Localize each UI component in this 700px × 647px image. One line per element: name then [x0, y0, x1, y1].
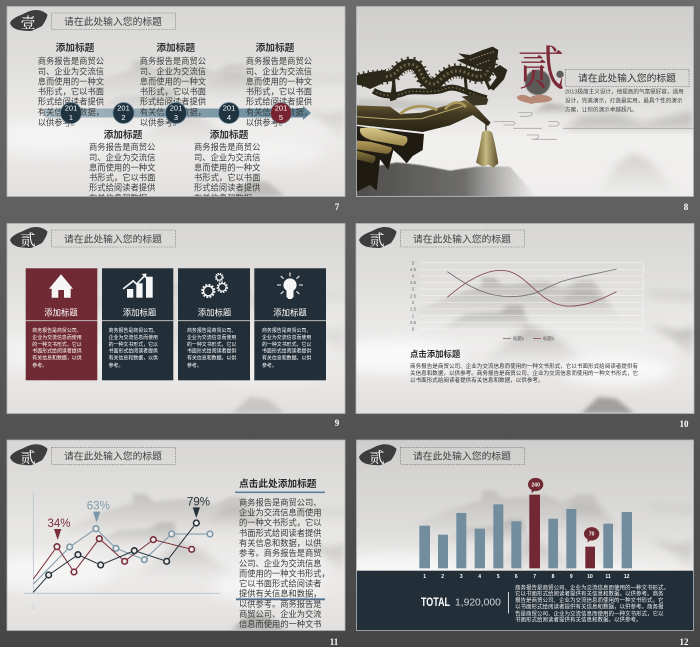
timeline node 2015: 201 [275, 104, 287, 112]
seal: 贰: 贰 [369, 232, 385, 249]
dragon legs and fins [359, 72, 490, 100]
seal: 贰 [10, 227, 48, 249]
text block: column 1: 书形式，它以书面 [38, 87, 104, 97]
value 79%: 79% [187, 496, 210, 508]
text block: 以书面形式给阅读者提供有关信息和数据，以供参考。 [410, 376, 544, 384]
card heading: 添加标题 [44, 308, 78, 318]
text block: column 3: 添加标题 [256, 41, 295, 54]
card 1: house [26, 268, 97, 380]
marker: maroon [54, 529, 61, 540]
text block: 而使用的一种文书形式， [239, 568, 330, 578]
timeline node 2014 [218, 102, 240, 124]
text block: 商务报告是商贸公司、企业为交流信息而使用的一种文书形式， [515, 584, 669, 592]
text block: 的一种文书形式，它以 [239, 518, 322, 528]
axis labels: 7 [533, 574, 536, 580]
seal: 贰: 贰 [20, 449, 36, 466]
line chart [24, 493, 220, 611]
card text: 商务报告是商贸公司、 [109, 327, 158, 334]
timeline node 2011: 201 [65, 104, 77, 112]
axis labels: 8 [552, 574, 555, 580]
title box [400, 447, 524, 464]
bell [485, 122, 487, 131]
axis labels: 4 [478, 574, 481, 580]
title box [565, 69, 689, 87]
card text: 商务报告是商贸公司、 [187, 327, 236, 334]
timeline node 2014: 201 [223, 104, 235, 112]
text block: column 1: 司、企业为交流信 [38, 66, 104, 76]
text block: column 2 [140, 41, 207, 127]
text block: column 2: 书形式，它以书面 [140, 87, 206, 97]
axis labels: 6 [515, 574, 518, 580]
card text: 有关信息和数据，以供 [32, 355, 82, 362]
timeline node 2013 [166, 102, 186, 124]
text block: 以书面形式给阅读者提供有关信息和数据，以供参考。商务报 [515, 603, 664, 611]
line chart: 3.5 [410, 280, 417, 285]
text block: column 2: 商务报告是商贸公 [140, 56, 206, 66]
text block: column 4: 有关信息和数据， [89, 193, 155, 203]
card text: 的一种文书形式，它以 [187, 341, 236, 348]
text block: 它以书面形式给阅读者提供有关信息和数据，以供参考。商务 [515, 590, 664, 598]
page number 10: 10 [680, 419, 689, 429]
card text: 参考。 [32, 362, 47, 369]
line chart: 5 [412, 260, 415, 266]
timeline node 2015 [270, 102, 292, 124]
line chart [410, 260, 643, 342]
marker: teal [93, 512, 100, 522]
card text: 参考。 [262, 362, 277, 369]
card heading: 添加标题 [123, 308, 157, 318]
text block: column 4: 息而使用的一种文 [89, 163, 156, 173]
panel: slide 9 four cards [0, 224, 345, 414]
icon: house [49, 274, 73, 298]
timeline node 2011 [60, 102, 82, 124]
total figure [421, 597, 501, 609]
card text: 参考。 [187, 362, 202, 369]
axis labels: 9 [570, 574, 573, 580]
text block: column 3: 形式给阅读者提供 [246, 97, 312, 107]
text block: column 1: 形式给阅读者提供 [38, 97, 104, 107]
page number 7: 7 [335, 202, 340, 212]
card 4: bulb [254, 268, 326, 380]
text block: intro: 设计，完美演示，打造最实用，最具个性的演示 [565, 96, 683, 104]
text block: 书面形式给阅读者提供 [239, 528, 322, 538]
text block: 以供参考。商务报告是 [239, 599, 322, 609]
text block: column 3: 书形式，它以书面 [246, 87, 312, 97]
panel: slide 11 line chart with text [0, 440, 345, 630]
timeline node 2015: 5 [279, 113, 283, 122]
timeline node 2012 [113, 102, 134, 124]
text block: 有关信息和数据，以供 [239, 538, 322, 548]
bar chart [419, 478, 632, 580]
axis labels: 5 [497, 574, 500, 580]
legend: 标题1 [513, 335, 525, 342]
title box: 请在此处输入您的标题 [64, 232, 162, 246]
page number 11: 11 [330, 637, 339, 647]
text block: column 4: 商务报告是商贸公 [89, 142, 155, 152]
text block: column 2: 添加标题 [156, 41, 195, 54]
card text: 书面形式给阅读者提供 [187, 348, 236, 355]
text block: column 2: 有关信息和数据， [140, 107, 206, 117]
timeline node 2013: 201 [170, 104, 182, 112]
page number 12: 12 [680, 637, 689, 647]
text block: intro: 方案，让你的演示卓越超凡。 [565, 106, 638, 114]
text block: column 2: 形式给阅读者提供 [140, 97, 206, 107]
text block: column 3: 商务报告是商贸公 [246, 56, 312, 66]
title box: 请在此处输入您的标题 [578, 72, 676, 84]
rule: bottom [236, 598, 325, 600]
text block: column 1 [38, 41, 105, 127]
mountains and mist [357, 98, 693, 197]
card heading: 添加标题 [198, 308, 232, 318]
timeline node 2012: 2 [121, 113, 126, 122]
dragon claw with pearl [489, 65, 507, 91]
line chart: 0 [412, 327, 415, 332]
heading: 点击此处添加标题 [239, 477, 317, 490]
line chart: 4 [412, 274, 415, 279]
line chart: 2 [412, 300, 415, 305]
icon: gears [202, 274, 227, 297]
text block: column 2: 司、企业为交流信 [140, 66, 206, 76]
text block: 书面形式给阅读者提供有关信息和数据，以供参考。 [515, 615, 642, 623]
seal: 壹: 壹 [20, 14, 36, 32]
text block: column 4: 添加标题 [104, 128, 143, 141]
marker: navy [193, 507, 200, 518]
text block: column 1: 商务报告是商贸公 [38, 56, 104, 66]
line chart: 1.5 [410, 307, 417, 312]
text block: 信息而使用的一种文书 [239, 619, 322, 629]
text block: column 1: 添加标题 [56, 41, 95, 54]
title box [52, 447, 176, 464]
text block: 商务报告是商贸公司、 [239, 497, 322, 507]
seal: 贰 [359, 227, 396, 249]
timeline node 2011: 1 [69, 113, 73, 122]
page number 9: 9 [335, 418, 340, 428]
card text: 有关信息和数据，以供 [187, 355, 236, 362]
text block: 商贸公司、企业为交流 [239, 609, 322, 619]
seal: 贰: 贰 [369, 449, 385, 466]
text block: column 3: 以供参考。 [246, 117, 287, 127]
band: dark footer [356, 571, 694, 630]
text block: column 1: 有关信息和数据， [38, 107, 104, 117]
text block: column 4: 书形式，它以书面 [89, 173, 155, 183]
axis zero: 0 [31, 605, 35, 611]
card text: 企业为交流信息而使用 [109, 334, 158, 341]
text block: column 5 [194, 130, 260, 196]
bubble: 70 [584, 527, 599, 543]
card text: 书面形式给阅读者提供 [32, 348, 82, 355]
axis labels: 3 [460, 574, 463, 580]
title box: 请在此处输入您的标题 [413, 232, 511, 246]
page number 8: 8 [684, 202, 689, 212]
card text: 企业为交流信息而使用 [32, 334, 82, 341]
card text: 书面形式给阅读者提供 [109, 348, 158, 355]
text block: column 5: 息而使用的一种文 [194, 163, 261, 173]
card text: 有关信息和数据，以供 [109, 355, 158, 362]
bubble: 240 [528, 478, 543, 493]
dragon body [360, 55, 491, 84]
text block: column 3: 有关信息和数据， [246, 107, 312, 117]
text block: 企业为交流信息而使用 [239, 508, 322, 518]
text block: column 5: 有关信息和数据， [194, 193, 260, 203]
text block: column 5: 形式给阅读者提供 [194, 183, 260, 193]
big character: 贰: 贰 [518, 32, 564, 99]
card text: 企业为交流信息而使用 [187, 334, 236, 341]
total figure: TOTAL [421, 597, 450, 609]
card text: 有关信息和数据，以供 [262, 355, 311, 362]
heading: 点击添加标题 [410, 349, 461, 359]
text block: 公司、企业为交流信息 [239, 558, 322, 568]
text block: column 4: 形式给阅读者提供 [89, 183, 155, 193]
icon: rising bars [123, 274, 153, 298]
title box [400, 230, 524, 247]
card text: 的一种文书形式，它以 [32, 341, 82, 348]
bubble label: 70: 70 [589, 532, 595, 538]
line chart: 2.5 [410, 293, 417, 298]
text block: column 4 [89, 130, 156, 196]
dragon spikes [360, 55, 491, 84]
text block: 报告是商贸公司、企业为交流信息而使用的一种文书形式，它 [515, 596, 664, 604]
title box: 请在此处输入您的标题 [413, 450, 511, 462]
line chart: 1 [412, 313, 415, 318]
panel: slide 8 section cover [356, 6, 694, 197]
text block: 商务报告是商贸公司、企业为交流信息而使用的一种文书形式，它以书面形式给阅读者提供有 [410, 362, 639, 370]
text block: column 3: 息而使用的一种文 [246, 77, 313, 87]
text block: column 2: 息而使用的一种文 [140, 77, 207, 87]
axis labels: 11 [605, 574, 611, 580]
card text: 商务报告是商贸公司、 [262, 327, 311, 334]
seal: 贰 [359, 444, 396, 466]
text block: column 2: 以供参考。 [140, 117, 181, 127]
panel: slide 10 curve chart [329, 224, 694, 414]
card text: 书面形式给阅读者提供 [262, 348, 311, 355]
card text: 的一种文书形式，它以 [262, 341, 311, 348]
series: teal [33, 526, 213, 584]
text block: column 5: 添加标题 [210, 128, 249, 141]
line chart: 0.5 [410, 320, 417, 325]
text block: column 1: 息而使用的一种文 [38, 77, 105, 87]
seal: 贰: 贰 [20, 232, 36, 249]
series: navy [33, 520, 199, 592]
card text: 的一种文书形式，它以 [109, 341, 158, 348]
divider [508, 592, 510, 614]
timeline node 2012: 201 [117, 104, 130, 112]
value 63%: 63% [87, 500, 110, 512]
axis labels: 10 [587, 574, 593, 580]
text block: column 5: 司、企业为交流信 [194, 152, 260, 162]
legend [503, 335, 555, 342]
text block: column 3 [246, 41, 313, 127]
value 34%: 34% [47, 518, 71, 530]
card text: 商务报告是商贸公司、 [32, 327, 82, 334]
dragon head [457, 47, 498, 71]
series: maroon [33, 536, 194, 579]
panel: slide 7 timeline [0, 6, 345, 203]
text block: 参考。商务报告是商贸 [239, 548, 322, 558]
total figure: 1,920,000 [455, 598, 501, 608]
card text: 企业为交流信息而使用 [262, 334, 311, 341]
axis labels: 12 [624, 574, 630, 580]
axis labels: 2 [441, 574, 444, 580]
roof beam [357, 100, 491, 132]
text block: 提供有关信息和数据， [239, 589, 322, 599]
card heading: 添加标题 [273, 308, 307, 318]
title box [52, 230, 176, 247]
title box: 请在此处输入您的标题 [64, 15, 162, 28]
rule: top [235, 491, 325, 493]
title box: 请在此处输入您的标题 [64, 450, 162, 462]
line chart: 3 [412, 287, 415, 292]
decoration: ink splash and clouds [493, 70, 693, 139]
icon: light bulb [277, 272, 303, 299]
text block: 告是商贸公司、企业为交流信息而使用的一种文书形式，它以 [515, 609, 664, 617]
arrow: timeline [45, 106, 311, 120]
card text: 参考。 [109, 362, 123, 369]
roof tiles [357, 126, 424, 192]
bubble label: 240: 240 [532, 482, 540, 488]
text block: column 4: 司、企业为交流信 [89, 152, 155, 162]
line chart: 4.5 [410, 267, 417, 272]
timeline node 2013: 3 [174, 113, 178, 122]
text block: column 3: 司、企业为交流信 [246, 66, 312, 76]
axis labels: 1 [423, 574, 426, 580]
illustration: dragon roof and bell [357, 47, 507, 192]
timeline node 2014: 4 [227, 113, 231, 122]
text block: 它以书面形式给阅读者 [239, 579, 322, 589]
legend: 标题2 [543, 335, 555, 342]
panel: slide 12 bar chart [329, 440, 694, 630]
card 2: chart [102, 268, 173, 380]
text block: intro: 2013极简主义设计，他提高的气氛很好容，适用 [565, 88, 684, 96]
seal: 贰 [10, 444, 48, 466]
text block: column 1: 以供参考。 [38, 117, 79, 127]
title box [52, 13, 176, 30]
text block: 关信息和数据，以供参考。商务报告是商贸公司、企业为交流信息而使用的一种文书形式，它 [410, 369, 639, 377]
text block: column 5: 商务报告是商贸公 [194, 142, 260, 152]
seal: 壹 [10, 10, 48, 32]
text block: column 5: 书形式，它以书面 [194, 173, 260, 183]
card 3: gears [178, 268, 250, 380]
